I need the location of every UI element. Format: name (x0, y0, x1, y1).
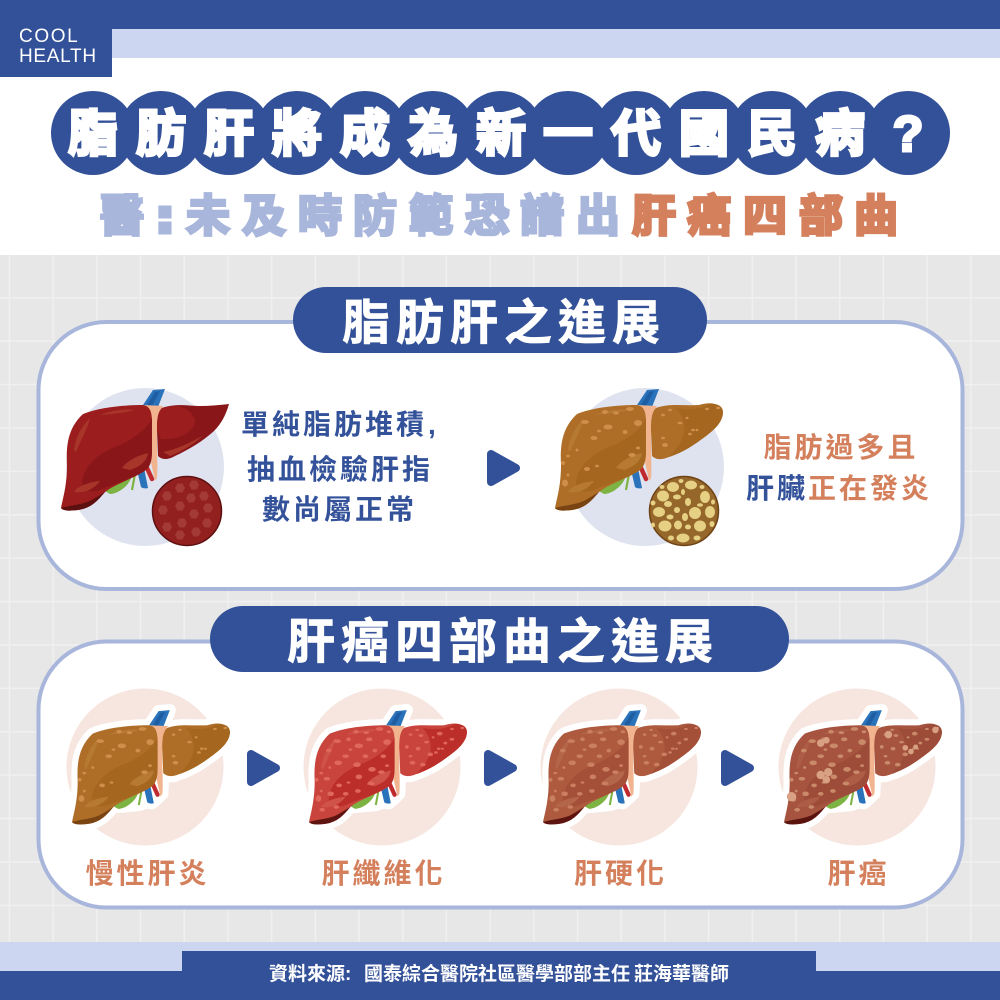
text: simple fat accumulation: 單純脂肪堆積, (241, 409, 439, 440)
label: 肝癌 (827, 858, 890, 889)
subtitle (100, 192, 898, 241)
panel box (38, 642, 962, 908)
grid background (0, 255, 1000, 945)
title circles (51, 91, 950, 175)
arrow (725, 754, 750, 782)
logo: Cool Health (0, 0, 112, 77)
text: simple fat accumulation: 數尚屬正常 (262, 494, 417, 525)
source text: 資料來源: (269, 963, 351, 985)
fat tissue close-up (650, 476, 718, 546)
panel: fatty liver progression (38, 287, 962, 589)
source text: 國泰綜合醫院社區醫學部部主任 (364, 962, 630, 985)
panel heading (210, 606, 789, 672)
stage: chronic hepatitis (66, 688, 230, 889)
panel: liver cancer progression (38, 606, 962, 908)
text: simple fat accumulation: 抽血檢驗肝指 (247, 453, 433, 485)
icon: fatty liver with fat cell circle (555, 388, 724, 546)
title text: 脂肪肝將成為新一代國民病? (68, 106, 923, 162)
top banner (0, 0, 1000, 58)
panel heading: 脂肪肝之進展 (342, 297, 666, 350)
footer (0, 942, 1000, 1000)
icon: normal fatty liver with cell circle (61, 388, 229, 546)
subtitle blue part: 醫未及時防範恐譜出 (100, 192, 620, 241)
logo: Cool Health: COOL (19, 26, 79, 47)
subtitle orange part: 肝癌四部曲 (632, 192, 898, 241)
stage: liver fibrosis (304, 688, 467, 889)
text: excess fat and inflammation: 肝臟正在發炎 (746, 473, 932, 504)
label: 肝纖維化 (321, 858, 446, 889)
label: 肝硬化 (574, 858, 667, 889)
arrow (251, 754, 276, 782)
tissue close-up (152, 476, 222, 546)
logo: Cool Health: HEALTH (19, 46, 97, 67)
text: simple fat accumulation (241, 409, 439, 525)
panel box (38, 322, 962, 589)
label: 慢性肝炎 (85, 858, 210, 889)
text: excess fat and inflammation: 脂肪過多且 (763, 432, 919, 463)
panel heading (293, 287, 707, 353)
panel heading: 肝癌四部曲之進展 (287, 616, 719, 669)
stage: cirrhosis (540, 688, 701, 889)
arrow (488, 754, 513, 782)
stage: liver cancer (778, 688, 942, 889)
title (51, 91, 950, 175)
arrow (491, 454, 516, 482)
subtitle colon: : (158, 192, 172, 241)
text: excess fat and inflammation (746, 432, 932, 504)
source text: 莊海華醫師 (634, 963, 729, 985)
